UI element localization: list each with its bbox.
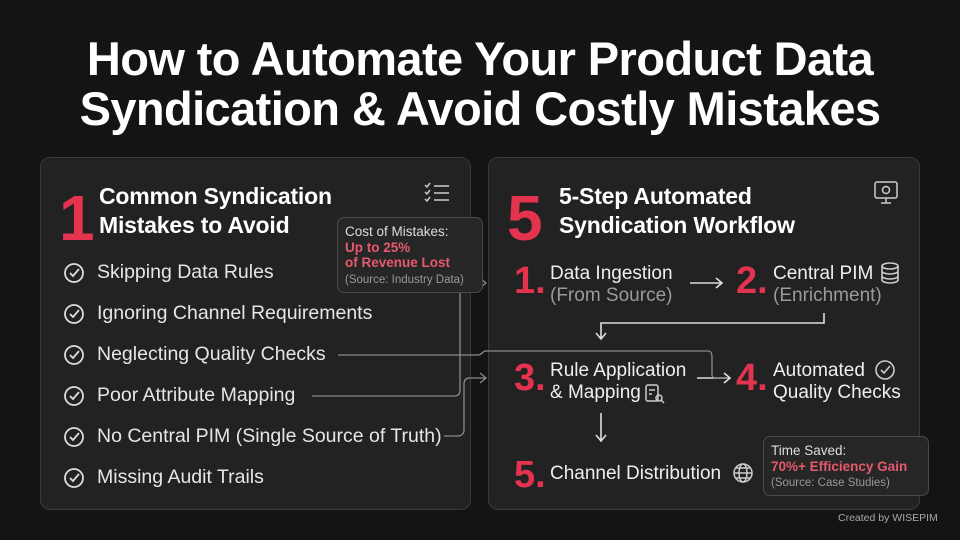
icon: check (875, 360, 895, 380)
icon: checklist (424, 182, 449, 202)
text: & Mapping (550, 382, 641, 403)
text: 4. (736, 357, 768, 399)
list items: Poor Attribute Mapping (97, 384, 295, 406)
panel: workflow (488, 157, 920, 510)
credit: Created by WISEPIM (838, 512, 938, 524)
title: Syndication & Avoid Costly Mistakes (80, 82, 880, 135)
text: Data Ingestion (550, 263, 673, 284)
number 1: 1 (59, 182, 95, 254)
number 5: 5 (507, 182, 543, 254)
heading: mistakes (99, 183, 332, 238)
heading: workflow: Syndication Workflow (559, 212, 795, 238)
title: How to Automate Your Product Data (87, 32, 873, 85)
callout: time saved: (Source: Case Studies) (771, 477, 890, 489)
text: Central PIM (773, 263, 873, 284)
heading: mistakes: Mistakes to Avoid (99, 212, 289, 238)
list items: Missing Audit Trails (97, 466, 264, 488)
text: 3. (514, 357, 546, 399)
text: Automated (773, 360, 865, 381)
text: Quality Checks (773, 382, 901, 403)
list items: Neglecting Quality Checks (97, 343, 326, 365)
icon: globe (733, 463, 753, 483)
heading: mistakes: Common Syndication (99, 183, 332, 209)
heading: workflow: 5-Step Automated (559, 183, 752, 209)
text: (Enrichment) (773, 285, 882, 306)
text: 5. (514, 454, 546, 496)
text: Channel Distribution (550, 463, 721, 484)
list items: No Central PIM (Single Source of Truth) (97, 425, 442, 447)
callout: cost of mistakes: of Revenue Lost (345, 255, 450, 270)
panel: mistakes (40, 157, 471, 510)
heading: workflow (559, 183, 796, 238)
callout: time saved: Time Saved: (771, 443, 846, 458)
title (80, 32, 880, 135)
list items (64, 261, 442, 488)
callout: cost of mistakes: Up to 25% (345, 240, 410, 254)
callout: cost of mistakes: (Source: Industry Data) (345, 274, 464, 286)
list items: Skipping Data Rules (97, 261, 274, 283)
list items: Ignoring Channel Requirements (97, 302, 372, 324)
callout: cost of mistakes: Cost of Mistakes: (345, 224, 449, 239)
text: Rule Application (550, 360, 686, 381)
icon: doc search (645, 384, 664, 404)
steps: 1. (514, 260, 546, 302)
callout: cost of mistakes (337, 217, 483, 293)
callout: time saved: 70%+ Efficiency Gain (771, 458, 907, 474)
icon: database (881, 262, 899, 284)
callout: time saved (763, 436, 929, 496)
icon: monitor (874, 181, 898, 204)
text: (From Source) (550, 285, 672, 306)
text: 2. (736, 260, 768, 302)
